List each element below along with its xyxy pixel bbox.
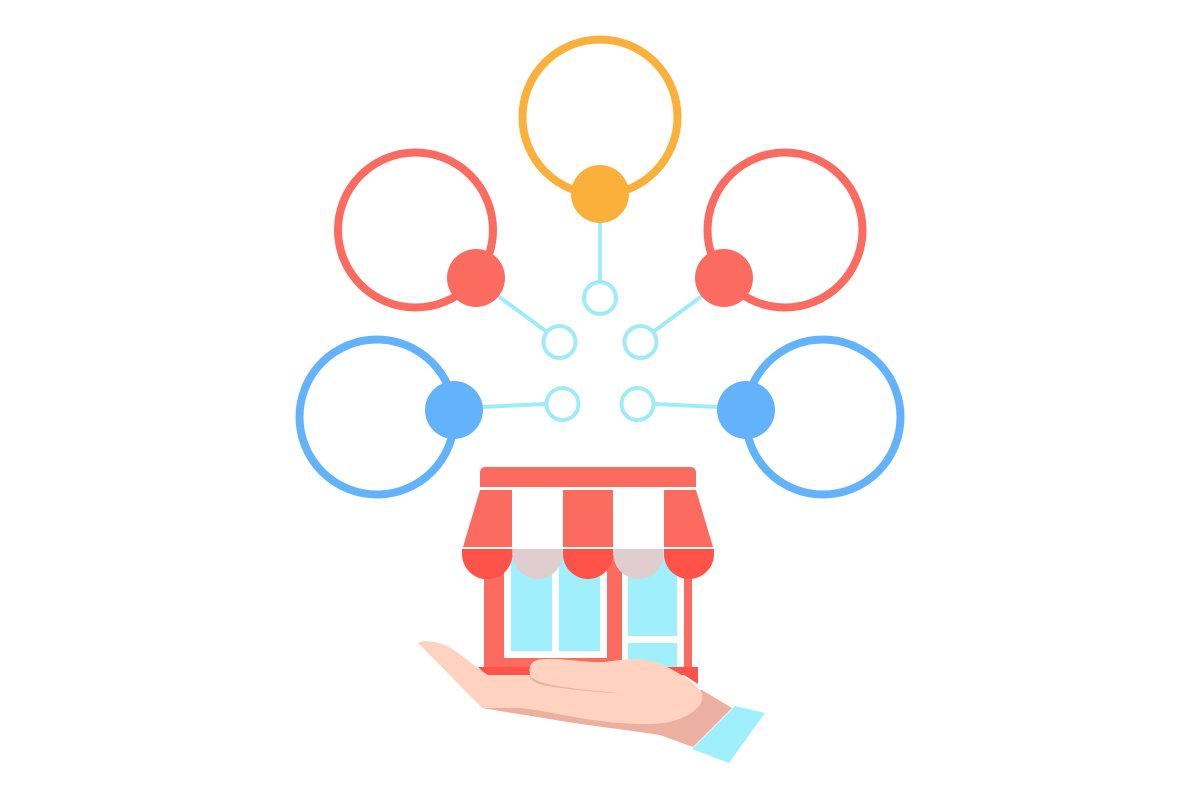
node: lower left blue xyxy=(300,340,578,494)
thumb crease xyxy=(529,674,624,694)
node: upper left red xyxy=(338,152,576,358)
wrist shadow xyxy=(482,690,732,747)
shop roof bar xyxy=(480,467,696,487)
icon: shop xyxy=(462,467,714,684)
shop walls and pillars xyxy=(484,555,692,668)
node: upper right red xyxy=(624,152,862,358)
node: top orange xyxy=(522,40,678,314)
awning stripes xyxy=(463,490,713,547)
hand palm xyxy=(418,641,702,724)
sleeve cuff xyxy=(692,706,765,763)
shop base xyxy=(478,667,698,684)
node: lower right blue xyxy=(622,340,900,494)
icon: hand holding shop xyxy=(418,641,765,763)
shop window xyxy=(504,555,607,658)
awning scallops xyxy=(462,549,714,579)
shop door xyxy=(622,555,684,673)
